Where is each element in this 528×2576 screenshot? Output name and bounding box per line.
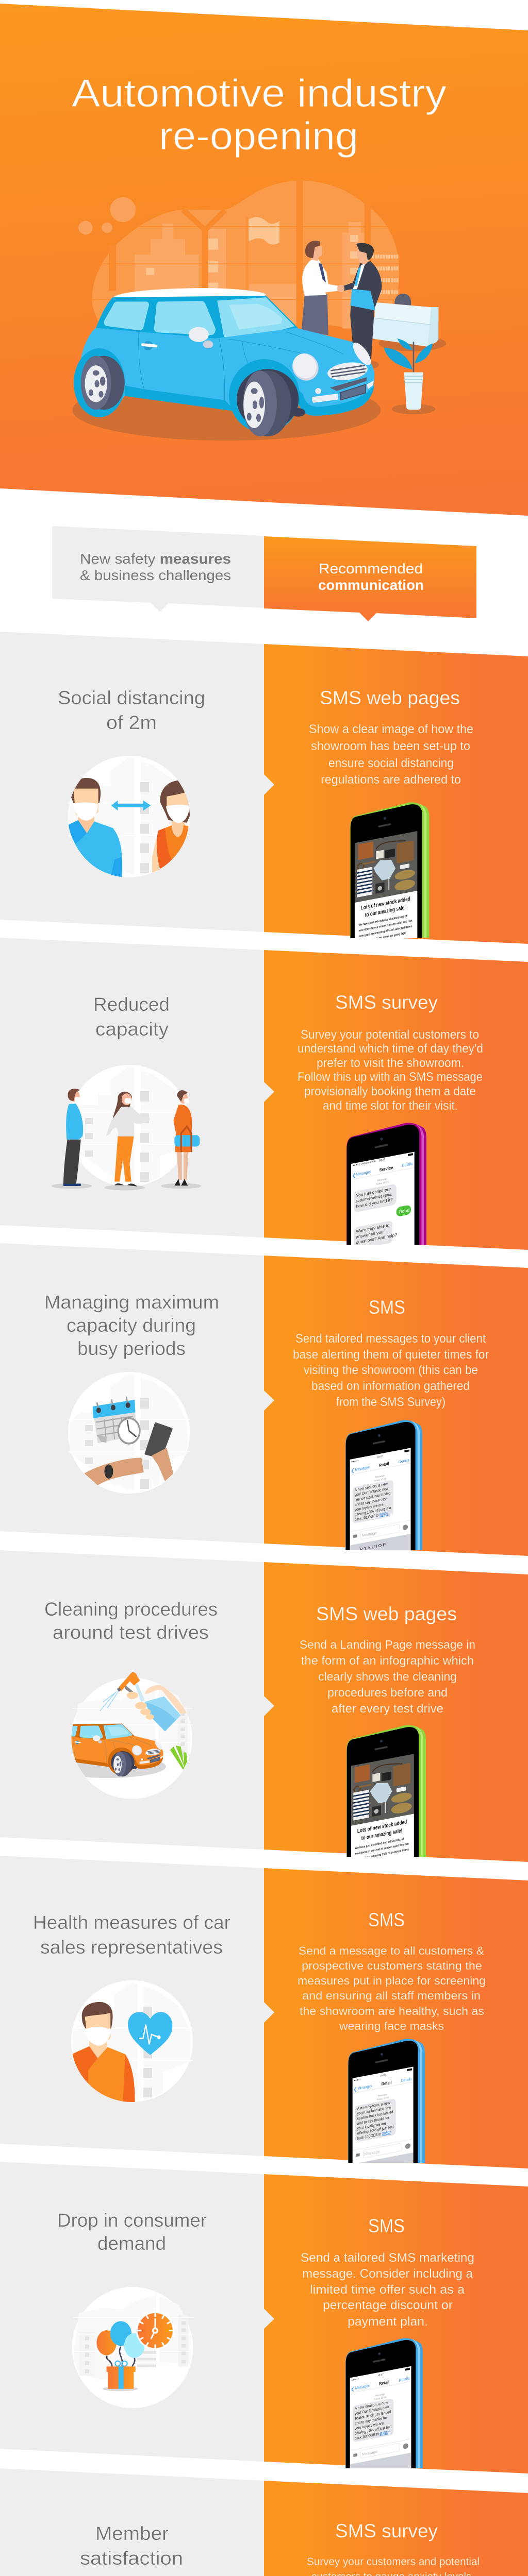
panel: SMS survey recommendation xyxy=(264,950,528,1250)
body text: Follow this up with an SMS message xyxy=(298,1070,483,1084)
body text: prefer to visit the showroom. xyxy=(317,1056,464,1070)
body text xyxy=(301,2251,474,2329)
panel: health measures challenge xyxy=(0,1856,264,2156)
heading: social distancing xyxy=(58,687,205,733)
column header: new safety measures: & business challenges xyxy=(80,567,231,583)
phone: retail chat: season stock has landed xyxy=(355,1491,390,1502)
heading: health measures xyxy=(33,1912,230,1958)
body text xyxy=(293,2556,493,2576)
phone: landing page: to our amazing sale! xyxy=(365,905,406,919)
phone: service chat xyxy=(346,1123,426,1245)
phone: retail chat: Details xyxy=(401,2076,412,2083)
body text xyxy=(309,722,473,787)
phone: retail chat: your loyalty we are xyxy=(355,2421,384,2431)
panel: SMS recommendation xyxy=(264,1256,528,1556)
phone: landing page: to our amazing sale! xyxy=(361,1827,402,1841)
phone: landing page: new items to our end of season sale! You can xyxy=(355,1842,409,1856)
phone: retail chat: Message xyxy=(362,2449,377,2456)
phone: retail chat: Retail xyxy=(379,2379,389,2386)
body text: Survey your customers and potential xyxy=(307,2556,480,2568)
body text: percentage discount or xyxy=(323,2298,453,2312)
phone: retail chat: season stock has landed xyxy=(357,2110,393,2121)
phone: retail chat: R T Y U I O P xyxy=(360,1542,386,1552)
phone: retail chat: A new season, a new xyxy=(355,2400,388,2411)
body text: clearly shows the cleaning xyxy=(318,1670,457,1683)
phone: retail chat: season stock has landed xyxy=(355,2410,391,2421)
panel: SMS web pages recommendation 2 xyxy=(264,1562,528,1894)
phone: retail chat: your loyalty we are xyxy=(355,1502,384,1512)
panel: member satisfaction challenge xyxy=(0,2468,264,2576)
panel: managing maximum capacity challenge xyxy=(0,1243,264,1544)
panel: SMS recommendation 2 xyxy=(264,1868,528,2168)
phone: retail chat: and to say thanks for xyxy=(355,2415,387,2426)
phone: retail chat: ●●●○○ xyxy=(351,1460,359,1464)
phone: retail chat: Details xyxy=(399,2376,410,2383)
phone: retail chat: ●●●○○ xyxy=(351,2378,359,2382)
phone: service chat: Message xyxy=(377,1177,387,1182)
heading: cleaning procedures: Cleaning procedures xyxy=(44,1599,218,1620)
heading: SMS: SMS xyxy=(369,1297,405,1318)
heading: SMS web pages: SMS web pages xyxy=(316,1603,457,1624)
icon: masked sales representative and heart xyxy=(71,1980,193,2103)
phone: retail chat: offering 10% off just text xyxy=(355,1505,391,1517)
heading: reduced capacity: Reduced xyxy=(93,994,170,1015)
phone: service chat: ●●●○○ vodafone UK xyxy=(353,1160,376,1167)
phone: retail chat: Details xyxy=(399,1458,409,1464)
phone: service chat: You just called our xyxy=(356,1187,391,1198)
heading: reduced capacity xyxy=(93,994,170,1040)
phone: landing page: new items to our end of season sale! You can xyxy=(359,919,412,933)
heading: managing maximum capacity: Managing maximum xyxy=(44,1292,219,1313)
heading: member satisfaction xyxy=(80,2523,183,2569)
body text: understand which time of day they'd xyxy=(298,1042,483,1056)
body text: message. Consider including a xyxy=(302,2267,473,2281)
phone: landing page: Lots of new stock added xyxy=(357,1819,407,1835)
heading: SMS survey: SMS survey xyxy=(335,2520,438,2541)
body text: Send tailored messages to your client xyxy=(295,1332,486,1346)
heading: health measures: Health measures of car xyxy=(33,1912,230,1933)
body text: Send a Landing Page message in xyxy=(300,1638,475,1651)
heading: SMS: SMS xyxy=(368,1909,405,1930)
phone: retail chat: Retail xyxy=(382,2079,392,2087)
body text: measures put in place for screening xyxy=(298,1974,486,1987)
phone: retail chat: your loyalty we are xyxy=(357,2121,386,2131)
heading: drop in consumer demand: demand xyxy=(97,2233,166,2254)
phone: retail chat: Messages xyxy=(358,2083,372,2091)
heading: cleaning procedures: around test drives xyxy=(53,1622,209,1643)
heading: social distancing: of 2m xyxy=(106,712,157,733)
phone: landing page xyxy=(350,802,429,938)
phone: retail chat: Message xyxy=(362,1530,377,1538)
title: re-opening xyxy=(159,114,358,158)
body text: the showroom are healthy, such as xyxy=(300,2005,484,2018)
body text: Survey your potential customers to xyxy=(301,1028,479,1042)
body text: provisionally booking them a date xyxy=(304,1084,476,1098)
phone: retail chat xyxy=(345,1420,422,1550)
body text xyxy=(298,1944,486,2032)
panel: SMS survey recommendation 2 xyxy=(264,2481,528,2576)
phone: retail chat: 10:07 xyxy=(377,2373,384,2377)
heading: health measures: sales representatives xyxy=(40,1937,223,1958)
phone: landing page: now grab an amazing 25% of selected items xyxy=(359,925,412,938)
phone: service chat: 10:37 xyxy=(378,1158,385,1162)
body text: procedures before and xyxy=(327,1686,448,1699)
phone: retail chat: Message xyxy=(375,1474,385,1479)
body text: ensure social distancing xyxy=(328,756,454,770)
body text xyxy=(298,1028,483,1113)
icon: calendar, clock, phone and watch xyxy=(68,1372,190,1494)
phone: retail chat: Today 10:08 xyxy=(376,2096,389,2101)
notch arrow xyxy=(264,1082,274,1102)
icon: gift box, balloons and clock xyxy=(72,2287,193,2408)
notch arrow xyxy=(264,2309,274,2329)
body text: based on information gathered xyxy=(311,1379,470,1393)
body text: visiting the showroom (this can be xyxy=(304,1363,478,1377)
body text: payment plan. xyxy=(348,2315,428,2329)
phone: service chat: Details xyxy=(402,1161,412,1168)
body text: and time slot for their visit. xyxy=(323,1099,458,1113)
icon: spray bottle and orange car xyxy=(71,1672,193,1799)
icon: two people with masks keeping distance xyxy=(68,756,194,877)
phone: retail chat: Message xyxy=(378,2093,388,2097)
phone: retail chat: A new season, a new xyxy=(357,2100,390,2111)
column header: recommended communication: Recommended xyxy=(319,561,423,577)
body text: Send a message to all customers & xyxy=(299,1944,484,1957)
phone: retail chat: Today 10:08 xyxy=(374,2396,387,2401)
heading: managing maximum capacity: busy periods xyxy=(77,1338,186,1359)
phone: service chat: Were they able to xyxy=(356,1223,390,1234)
heading: SMS: SMS xyxy=(368,2215,405,2236)
hero panel background xyxy=(0,4,528,516)
phone: retail chat xyxy=(348,2039,425,2163)
title: Automotive industry xyxy=(72,72,447,115)
notch arrow xyxy=(264,774,274,795)
panel: SMS recommendation 3 xyxy=(264,2174,528,2473)
title xyxy=(72,72,447,158)
body text: base alerting them of quieter times for xyxy=(293,1348,489,1362)
heading: member satisfaction: satisfaction xyxy=(80,2548,183,2569)
panel: drop in consumer demand challenge xyxy=(0,2162,264,2462)
body text: Show a clear image of how the xyxy=(309,722,473,736)
body text: limited time offer such as a xyxy=(310,2283,465,2297)
phone: service chat: how did you find it? xyxy=(356,1197,393,1209)
phone: retail chat: you! Our fantastic new xyxy=(355,1486,389,1497)
phone: retail chat: Messages xyxy=(355,2383,370,2391)
panel: reduced capacity challenge xyxy=(0,938,264,1238)
heading: managing maximum capacity: capacity during xyxy=(67,1315,196,1336)
notch arrow xyxy=(264,1696,274,1716)
panel: social distancing challenge xyxy=(0,632,264,932)
phone: service chat: Today 10:30 xyxy=(376,1180,389,1185)
phone: landing page: now grab an amazing 25% of selected items xyxy=(355,1848,409,1861)
phone: retail chat: you! Our fantastic new xyxy=(355,2405,389,2416)
heading: drop in consumer demand: Drop in consumer xyxy=(57,2210,207,2231)
phone: retail chat: 10:07 xyxy=(380,2074,386,2078)
notch arrow xyxy=(264,1391,274,1411)
phone: retail chat xyxy=(345,2338,423,2468)
heading: SMS survey: SMS survey xyxy=(335,992,438,1013)
phone: service chat: Good xyxy=(399,1207,409,1214)
phone: retail chat: A new season, a new xyxy=(355,1481,388,1493)
body text: the form of an infographic which xyxy=(301,1654,474,1667)
body text: and ensuring all staff members in xyxy=(302,1989,481,2002)
phone: retail chat: Message xyxy=(375,2393,385,2397)
phone: retail chat: 10:07 xyxy=(377,1455,384,1459)
phone: service chat: answer all your xyxy=(356,1229,385,1240)
body text: wearing face masks xyxy=(339,2020,444,2032)
phone: retail chat: ●●●○○ xyxy=(354,2078,361,2082)
body text: prospective customers stating the xyxy=(302,1959,482,1972)
body text: Send a tailored SMS marketing xyxy=(301,2251,474,2265)
heading: SMS web pages: SMS web pages xyxy=(320,687,460,708)
body text: after every test drive xyxy=(332,1702,443,1715)
phone: service chat: Messages xyxy=(356,1170,371,1177)
phone: retail chat: offering 10% off just text xyxy=(355,2424,392,2436)
phone: retail chat: back 10CODE to 88802 xyxy=(355,2430,389,2441)
body text: showroom has been set-up to xyxy=(311,739,470,753)
column header: recommended communication xyxy=(264,536,476,621)
column header: new safety measures: New safety measures xyxy=(80,551,231,567)
phone: retail chat: offering 10% off just text xyxy=(357,2124,394,2136)
hero illustration: car and showroom xyxy=(72,180,446,440)
phone: landing page xyxy=(346,1725,426,1857)
phone: retail chat: Today 10:08 xyxy=(374,1477,387,1482)
phone: retail chat: you! Our fantastic new xyxy=(357,2105,391,2116)
heading: social distancing: Social distancing xyxy=(58,687,205,708)
heading: member satisfaction: Member xyxy=(95,2523,169,2544)
phone: retail chat: back 10CODE to 88802 xyxy=(357,2130,391,2141)
heading: reduced capacity: capacity xyxy=(95,1019,169,1040)
column header: new safety measures xyxy=(52,526,264,612)
heading: managing maximum capacity xyxy=(44,1292,219,1359)
phone: landing page: We have just extended and added lots of xyxy=(355,1838,404,1850)
phone: landing page: but hurry, items are going fast! xyxy=(372,932,406,941)
phone: service chat: customer service team, xyxy=(356,1192,392,1204)
body text xyxy=(293,1332,489,1409)
body text: from the SMS Survey) xyxy=(336,1395,446,1409)
phone: retail chat: Messages xyxy=(355,1465,370,1472)
notch arrow xyxy=(264,2002,274,2023)
body text xyxy=(300,1638,475,1715)
phone: retail chat: back 10CODE to 88802 xyxy=(355,1511,388,1522)
panel: cleaning procedures challenge xyxy=(0,1550,264,1850)
phone: retail chat: and to say thanks for xyxy=(355,1497,387,1507)
phone: service chat: Service xyxy=(380,1165,393,1173)
icon: three people queueing with masks xyxy=(52,1065,202,1190)
column header: recommended communication: communication xyxy=(318,577,424,593)
phone: service chat: questions? And help? xyxy=(356,1232,397,1245)
phone: retail chat: and to say thanks for xyxy=(357,2115,389,2126)
body text: regulations are adhered to xyxy=(321,773,461,787)
phone: retail chat: Retail xyxy=(379,1461,389,1468)
panel: SMS web pages recommendation xyxy=(264,644,528,971)
heading: cleaning procedures xyxy=(44,1599,218,1643)
heading: drop in consumer demand xyxy=(57,2210,207,2254)
phone: retail chat: Message xyxy=(365,2149,380,2157)
phone: landing page: We have just extended and added lots of xyxy=(359,915,407,927)
phone: landing page: Lots of new stock added xyxy=(361,896,410,911)
